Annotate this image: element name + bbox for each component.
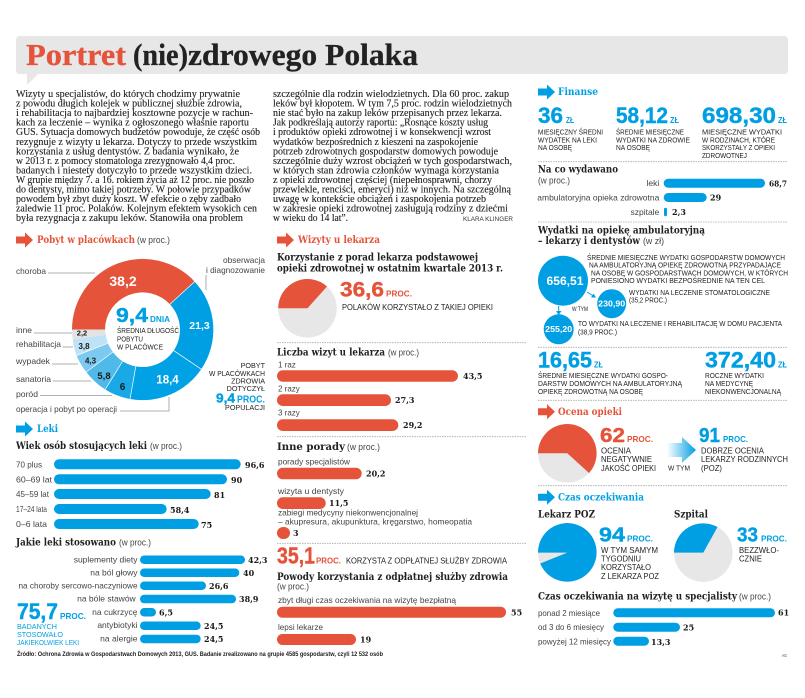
pie chart: 33 proc. [674,523,733,582]
bar chart: liczba wizyt: 3 razy [278,409,300,418]
donut chart: 6 [120,382,126,393]
bar chart: liczba wizyt: 27,3 [395,395,415,405]
donut centre stat: ŚREDNIA DŁUGOŚĆ [117,326,179,335]
stat: 36,6 proc.: POLAKÓW KORZYSTAŁO Z TAKIEJ OPIEKI [342,303,493,312]
heading: Leki: Leki [37,423,58,435]
bar chart: jakie leki: 38,9 [239,594,259,604]
panel: Czas oczekiwania [538,490,789,647]
bar chart: wiek: 0–6 lata [16,519,47,529]
bar chart: wiek: 75 [201,520,212,530]
stat: 35,1 proc.: PROC. [316,555,341,565]
intro text column 2: KLARA KLINGER [463,216,513,223]
bubble diagram: 230,90 [598,300,626,308]
subheading: Jakie leki: Jakie leki stosowano [15,537,116,549]
stat: 94 proc.: W TYM SAMYM [601,546,658,555]
stat: 16,65 zł: ŚREDNIE MIESIĘCZNE WYDATKI GOSPO- [538,371,669,380]
bar chart: wiek: 70 plus [16,460,42,470]
bar chart: jakie leki [18,554,268,644]
bar chart: inne porady: porady specjalistów [278,456,351,466]
title banner [16,36,788,85]
intro text column 1: badanych i niestety dotyczyło to przede wszystkim dzieci. [16,165,252,176]
callout: 9,4 proc. populacji: W PLACÓWKACH [209,369,265,378]
intro text column 2: leków był kłopotem. W tym 7,5 proc. rodzin wielodzietnych [273,98,513,110]
intro text column 2: nie stać było na zakup leków przepisanych przez lekarza. [273,108,502,119]
stat: 94 proc.: 94 [599,523,626,546]
callout: 9,4 proc. populacji: POBYT [241,361,266,370]
stat: 372,40 zł: NIEKONWENCJONALNĄ [705,387,781,396]
intro text column 2: szczególnie duży wzrost obciążeń w tych gospodarstwach, [273,156,512,167]
callout: 75,7 proc.: JAKIEKOLWIEK LEKI [17,638,79,647]
stat: 91 proc.: (POZ) [701,464,722,473]
stat: 62 proc. [600,424,656,473]
bar chart: wiek: 58,4 [170,505,190,515]
intro text column 1: GUS. Sytuacja domowych budżetów powoduje, że część osób [16,127,260,138]
intro text column 1: rezygnuje z wizyty u lekarza. Dotyczy to przede wszystkim [16,137,258,148]
panel: Pobyt w placówkach [15,232,266,414]
heading: Finanse: Finanse [558,86,598,98]
panel: Leki [15,422,268,647]
intro text column 2: w wieku do 14 lat”. [273,213,348,224]
stat: 36,6 proc.: 36,6 [340,278,384,302]
bar chart: na co wydawano [537,178,787,217]
stat: 62 proc.: NEGATYWNIE [601,455,652,464]
stat: 698,30 zł: W RODZINACH, KTÓRE [702,135,775,144]
subheading: Na co wydawano: Na co wydawano [538,164,618,176]
stat: 58,12 zł: 58,12 [616,103,668,128]
bubble annotations: PONIESIONO WYDATKI BEZPOŚREDNIE NA TEN CEL [591,276,765,285]
stat: 372,40 zł [705,348,787,396]
intro text column 1: w 2013 r. z pomocy stomatologa zrezygnowało 4,4 proc. [16,156,235,167]
bar chart: wiek: 45–59 lat [16,489,50,499]
subheading: Czas oczekiwania na wizytę: (w proc.) [739,591,771,601]
callout: 9,4 proc. populacji: POPULACJI [225,403,265,412]
bubble annotations: NA OSOBĘ W GOSPODARSTWACH DOMOWYCH, W KTÓRYCH [591,268,788,277]
heading: Ocena opieki: Ocena opieki [558,406,622,418]
bar chart: inne porady [277,456,472,539]
icon: blue arrow [538,84,555,100]
bar chart: jakie leki: 42,3 [248,555,268,565]
intro text column 2 [273,89,513,224]
stat: 62 proc.: OCENIA [601,446,632,455]
stat: 58,12 zł: WYDATKI NA ZDROWIE [616,135,690,144]
bubble diagram: W TYM [572,306,588,313]
donut chart: 21,3 [189,320,210,332]
bar chart: jakie leki: na ból głowy [90,568,138,578]
bar chart: czas oczekiwania: 25 [683,622,694,632]
bar chart: czas oczekiwania: ponad 2 miesiące [538,608,600,618]
intro text column 2: w których stan zdrowia członków wymaga korzystania [273,165,499,176]
panel: Ocena opieki [538,404,788,486]
donut category labels: choroba [16,266,46,276]
subheading: Inne porady [277,441,380,453]
subheading: Powody korzystania: (w proc.) [277,582,309,592]
donut chart [72,259,213,400]
stat: 372,40 zł: ROCZNE WYDATKI [705,371,764,380]
stat: 58,12 zł [616,103,690,152]
stat: 33 proc.: BEZZWŁO- [739,546,779,555]
bar chart: inne porady: – akupresura, akupunktura, kręgarstwo, homeopatia [278,517,472,527]
stat: 372,40 zł: NA MEDYCYNĘ [705,379,753,388]
bar chart: na co wydawano: leki [647,178,659,188]
bar chart: jakie leki: 6,5 [159,608,173,618]
bar chart: liczba wizyt: 43,5 [463,371,482,381]
stat: 16,65 zł [538,348,682,396]
subheading: Wydatki na opiekę: – lekarzy i dentystów [538,235,641,247]
bar chart: liczba wizyt: 1 raz [278,361,296,370]
bar chart: powody [277,595,522,645]
icon: blue arrow [538,490,555,505]
donut centre stat: W PLACÓWCE [117,342,163,352]
bar chart: czas oczekiwania [538,608,789,647]
bubble diagram: 255,20 [545,325,573,334]
heading: Pobyt w placówkach: (w proc.) [137,235,170,245]
stat: 372,40 zł: 372,40 [705,348,776,373]
bar chart: jakie leki: na cukrzycę [92,607,138,617]
stat: 16,65 zł: DARSTW DOMOWYCH NA AMBULATORYJNĄ [538,379,682,388]
bar chart: powody: zbyt długi czas oczekiwania na wizytę bezpłatną [278,595,456,605]
bar chart: czas oczekiwania: 13,3 [651,637,671,647]
subheading: Korzystanie z porad [277,252,503,275]
intro text column 2: Jak podkreślają autorzy raportu: „Rosnące koszty usług [273,118,489,129]
icon: red arrow [16,232,33,248]
stat: 698,30 zł: MIESIĘCZNE WYDATKI [702,128,782,137]
bubble annotations: WYDATKI NA LECZENIE STOMATOLOGICZNE [629,288,770,297]
subheading: Czas oczekiwania na wizytę: Czas oczekiwania na wizytę u specjalisty [538,590,738,602]
stat: 36 zł: MIESIĘCZNY ŚREDNI [538,128,603,137]
stat: 698,30 zł: SKORZYSTAŁY Z OPIEKI [702,143,775,152]
subheading: Szpital: Szpital [674,508,708,520]
stat: 698,30 zł: ZŁ [778,115,787,125]
stat: 698,30 zł [702,103,787,160]
bar chart: czas oczekiwania: 61 [778,608,789,618]
subheading: Wiek osób: (w proc.) [150,441,182,451]
donut chart: 3,8 [78,342,90,351]
stat: 36 zł: ZŁ [566,115,574,125]
stat: 94 proc.: TYGODNIU [601,555,641,564]
subheading: Wydatki na opiekę: (w zł) [643,236,664,246]
donut category labels: sanatoria [16,374,51,384]
bar chart: powody: 19 [360,634,372,644]
bar chart: jakie leki: na choroby sercowo-naczyniowe [18,580,138,590]
bar chart: na co wydawano: 68,7 [769,178,787,188]
stat: 58,12 zł: NA OSOBĘ [616,143,650,152]
stat: 35,1 proc. [277,542,508,568]
callout: 9,4 proc. populacji [209,361,266,412]
stat: 16,65 zł: 16,65 [538,348,592,373]
bar chart: na co wydawano: szpitale [630,207,660,217]
bar chart: wiek: 81 [214,490,225,500]
bar chart: jakie leki: 26,6 [209,581,229,591]
donut chart: 4,3 [85,356,97,366]
pie chart: 94 proc. [538,523,597,582]
donut category labels: obserwacja [223,255,265,265]
donut category labels: wypadek [15,356,51,366]
subheading: Wydatki na opiekę: Wydatki na opiekę ambulatoryjną [537,224,705,236]
donut category labels: inne [16,325,32,335]
intro text column 1 [16,89,260,224]
arrow: w tym [667,437,696,473]
stat: 91 proc. [699,424,788,473]
stat: 16,65 zł: ZŁ [594,360,603,370]
stat: 94 proc.: Z LEKARZA POZ [601,572,659,581]
donut chart: 18,4 [156,374,179,386]
intro text column 1: korzystania z usług dentystów. Z badania wynikało, że [16,146,239,157]
stat: 62 proc.: 62 [600,424,625,447]
donut centre stat: 9,4 [116,304,149,327]
pie chart: 62 proc. [538,424,597,483]
stat: 91 proc.: 91 [699,424,720,447]
panel: Wizyty u lekarza [277,232,527,645]
donut category labels: i diagnozowanie [206,265,265,275]
stat: 36,6 proc.: PROC. [386,289,412,299]
stat: 372,40 zł: ZŁ [778,360,787,370]
bubble diagram: 656,51 [546,276,584,288]
icon: red arrow [277,232,294,248]
stat: 36 zł: WYDATEK NA LEKI [538,135,597,144]
callout: 75,7 proc.: STOSOWAŁO [17,630,63,639]
title banner: (nie) [133,37,188,72]
stat: 33 proc.: CZNIE [739,555,762,564]
bar chart: wiek: 17–24 lata [16,504,47,514]
bar chart: jakie leki: antybiotyki [97,620,138,630]
stat: 36 zł [538,103,603,152]
callout: 9,4 proc. populacji: PROC. [237,394,265,406]
stat: 33 proc.: 33 [737,523,758,546]
bubble diagram [538,256,626,344]
intro text column 2: uwagę w kontekście obciążeń i zaspokojenia potrzeb [273,194,486,205]
stat: 35,1 proc.: KORZYSTA Z ODPŁATNEJ SŁUŻBY ZDROWIA [346,556,508,565]
bar chart: jakie leki: 24,5 [204,634,223,644]
bar chart: liczba wizyt: 29,2 [403,420,422,430]
intro text column 2: przewlekle, renciści, emeryci) niż w innych. Na szczególną [273,184,511,196]
subheading: Jakie leki: (w proc.) [119,538,151,548]
pie chart: 36,6 proc. [278,279,337,338]
subheading: Na co wydawano: (w proc.) [538,176,570,186]
bar chart: liczba wizyt [277,361,482,431]
donut chart: 38,2 [109,273,137,289]
bar chart: wiek: 60–69 lat [16,474,53,484]
heading: Pobyt w placówkach: Pobyt w placówkach [37,234,135,246]
subheading: Powody korzystania: Powody korzystania z odpłatnej służby zdrowia [277,571,508,583]
title banner: zdrowego Polaka [188,37,419,72]
callout: 75,7 proc. [17,599,86,647]
subheading: Inne porady: (w proc.) [347,442,380,452]
subheading: Liczba wizyt: (w proc.) [388,348,419,358]
bar chart: inne porady: zabiegi medycyny niekonwencjonalnej [278,508,418,518]
donut chart: 5,8 [97,371,111,382]
stat: 62 proc.: PROC. [627,434,653,444]
subheading: Korzystanie z porad: opieki zdrowotnej w ostatnim kwartale 2013 r. [277,263,503,275]
source note: Źródło: Ochrona Zdrowia w Gospodarstwach Domowych 2013, GUS. Badanie zrealizowano na grupie 4585 gospodarstw, czyli 12 532 osób [17,650,383,658]
title banner: Portret [26,37,127,72]
bubble annotations: (38,9 PROC.) [578,327,617,336]
stat: 16,65 zł: OPIEKĘ ZDROWOTNĄ NA OSOBĘ [538,387,643,396]
subheading: Wydatki na opiekę [537,224,705,247]
donut category labels: rehabilitacja [16,339,61,349]
bar chart: na co wydawano: 2,3 [672,207,686,217]
bar chart: inne porady: 3 [293,528,299,538]
stat: 33 proc. [737,523,787,564]
subheading: Wiek osób: Wiek osób stosujących leki [15,440,147,452]
stat: 58,12 zł: ZŁ [670,115,679,125]
intro text column 2: z opieki zdrowotnej częściej (niepełnosprawni, chorzy [273,175,493,186]
stat: 36 zł: 36 [538,103,563,128]
stat: 36,6 proc. [340,278,493,312]
intro text column 1: kach za leczenie – wynika z ogłoszonego właśnie raportu [16,118,250,129]
bar chart: jakie leki: na bóle stawów [77,594,137,604]
stat: 62 proc.: JAKOŚĆ OPIEKI [601,464,656,473]
bar chart: jakie leki: na alergie [100,634,138,644]
intro text column 2: i produktów opieki zdrowotnej i w konsekwencji wzrost [273,127,491,138]
stat: 94 proc.: KORZYSTAŁO [601,563,651,572]
intro text column 1: do dentysty, mimo takiej potrzeby. W połowie przypadków [16,184,251,196]
credit: AG: AG [782,653,787,658]
donut centre stat: DNIA [150,314,170,324]
bubble annotations: ŚREDNIE MIESIĘCZNE WYDATKI GOSPODARSTW DOMOWYCH [587,253,785,262]
bar chart: powody: 55 [511,608,522,618]
stat: 91 proc.: DOBRZE OCENIA [701,446,765,455]
donut centre stat: POBYTU [117,334,143,344]
intro text column 1: W grupie między 7. a 16. rokiem życia aż 12 proc. nie poszło [16,175,254,186]
bar chart: na co wydawano: ambulatoryjna opieka zdrowotna [537,192,660,202]
intro text column 2: potrzeb zdrowotnych gospodarstw domowych powoduje [273,146,498,157]
callout: 75,7 proc.: 75,7 [17,599,58,624]
bar chart: na co wydawano: 29 [710,192,722,202]
stat: 94 proc.: PROC. [627,533,653,543]
bar chart: czas oczekiwania: od 3 do 6 miesięcy [538,622,605,632]
intro text column 1: zaledwie 11 proc. Polaków. Kolejnym efektem wysokich cen [16,204,258,215]
bubble annotations: TO WYDATKI NA LECZENIE I REHABILITACJĘ W DOMU PACJENTA [578,319,782,328]
panel: Finanse [537,84,788,400]
bar chart: wiek [16,459,265,530]
intro text column 1: była rezygnacja z zakupu leków. Stanowiła ona problem [16,213,244,224]
donut category labels [15,255,265,414]
intro text column 1: Wizyty u specjalistów, do których chodzimy prywatnie [16,89,240,100]
callout: 9,4 proc. populacji: ZDROWIA [231,376,265,386]
intro text column 1: powodem był zbyt duży koszt. W efekcie o zęby zadbało [16,194,241,205]
bar chart: inne porady: 20,2 [366,468,385,478]
bubble annotations: NA AMBULATORYJNĄ OPIEKĘ ZDROWOTNĄ PRZYPADAJĄCE [589,261,781,270]
intro text column 2: w zakresie opieki zdrowotnej zasługują rodziny z dziećmi [273,204,508,215]
subheading: Liczba wizyt: Liczba wizyt u lekarza [277,347,385,359]
icon: blue arrow [16,422,33,436]
stat: 94 proc. [599,523,659,581]
bar chart: wiek: 90 [231,475,243,485]
bubble annotations: (35,2 PROC.) [629,296,667,305]
icon: red arrow [538,404,555,419]
stat: 698,30 zł: ZDROWOTNEJ [702,151,747,160]
heading: Czas oczekiwania: Czas oczekiwania [558,492,644,504]
donut centre stat [116,304,179,352]
stat: 35,1 proc.: 35,1 [277,542,315,568]
stat: 33 proc.: PROC. [761,533,787,543]
donut chart: 2,2 [77,328,87,338]
callout: 9,4 proc. populacji: DOTYCZYŁ [227,384,265,393]
stat: 36 zł: NA OSOBĘ [538,143,572,152]
intro text column 1: z powodu długich kolejek w publicznej służbie zdrowia, [16,98,242,110]
bar chart: jakie leki: suplementy diety [74,554,138,564]
stat: 91 proc.: LEKARZY RODZINNYCH [701,455,788,464]
bar chart: inne porady: wizyta u dentysty [277,486,345,496]
intro text column 2: szczególnie dla rodzin wielodzietnych. Dla 60 proc. zakup [273,89,509,100]
bar chart: czas oczekiwania: powyżej 12 miesięcy [538,636,612,646]
heading: Wizyty u lekarza: Wizyty u lekarza [297,234,380,246]
subheading: Lekarz POZ: Lekarz POZ [538,508,595,520]
subheading: Korzystanie z porad: Korzystanie z porad lekarza podstawowej [277,252,478,264]
intro text column 2: wydatków bezpośrednich z kieszeni na zaspokojenie [273,137,478,148]
bar chart: jakie leki: 40 [243,568,255,578]
subheading: Powody korzystania [277,571,508,592]
stat: 58,12 zł: ŚREDNIE MIESIĘCZNE [616,128,684,137]
arrow: w tym: W TYM [668,464,690,473]
callout: 9,4 proc. populacji: 9,4 [216,390,236,406]
bar chart: jakie leki: 24,5 [204,621,223,631]
bubble annotations [578,253,788,336]
stat: 698,30 zł: 698,30 [702,103,776,128]
donut category labels: poród [16,389,38,399]
bar chart: powody: lepsi lekarze [278,622,323,632]
callout: 75,7 proc.: BADANYCH [17,622,57,631]
subheading: Na co wydawano [538,164,618,186]
subheading: Inne porady: Inne porady [277,441,346,453]
donut category labels: operacja i pobyt po operacji [16,404,117,414]
bar chart: wiek: 96,6 [245,460,265,470]
callout: 75,7 proc.: PROC. [60,611,86,621]
stat: 91 proc.: PROC. [723,434,748,444]
bar chart: inne porady: 11,5 [329,498,348,508]
bar chart: liczba wizyt: 2 razy [278,385,300,394]
intro text column 1: i rehabilitacja to najbardziej kosztowne pozycje w rachun- [16,108,253,119]
